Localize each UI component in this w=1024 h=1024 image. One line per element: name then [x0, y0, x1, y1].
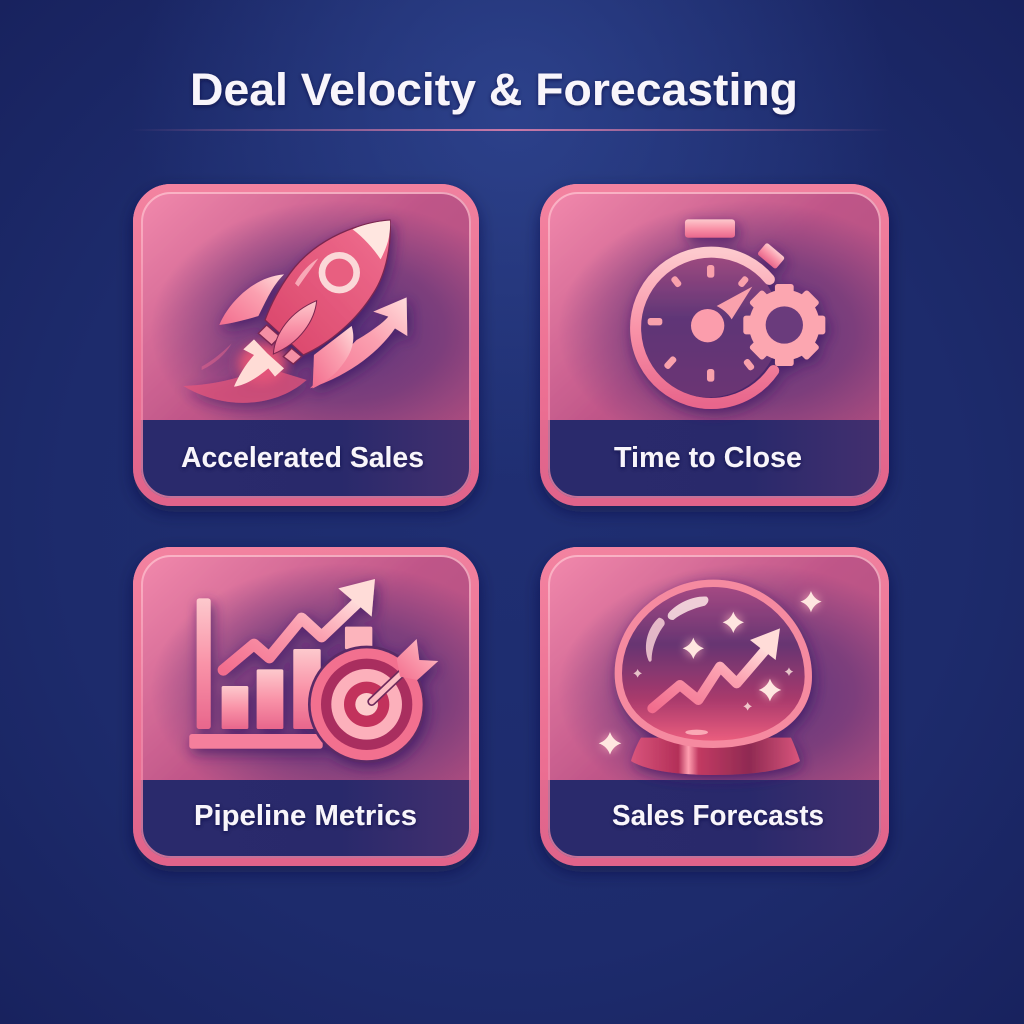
label: pipeline metrics: Pipeline Metrics — [194, 800, 417, 832]
icon: crystal ball — [599, 583, 822, 775]
panel: time to close — [540, 184, 889, 506]
label: accelerated sales: Accelerated Sales — [181, 442, 424, 474]
panel: pipeline metrics — [133, 547, 479, 866]
icon: sparkles — [599, 591, 822, 755]
title: Deal Velocity & Forecasting — [190, 64, 798, 115]
panel: accelerated sales — [133, 184, 479, 506]
label: sales forecasts: Sales Forecasts — [612, 800, 824, 832]
panel: sales forecasts — [540, 547, 889, 866]
label: time to close: Time to Close — [614, 442, 802, 474]
icon: bar chart and target — [189, 579, 438, 763]
icon: rocket — [183, 220, 407, 403]
icon: stopwatch and gear — [636, 219, 825, 404]
